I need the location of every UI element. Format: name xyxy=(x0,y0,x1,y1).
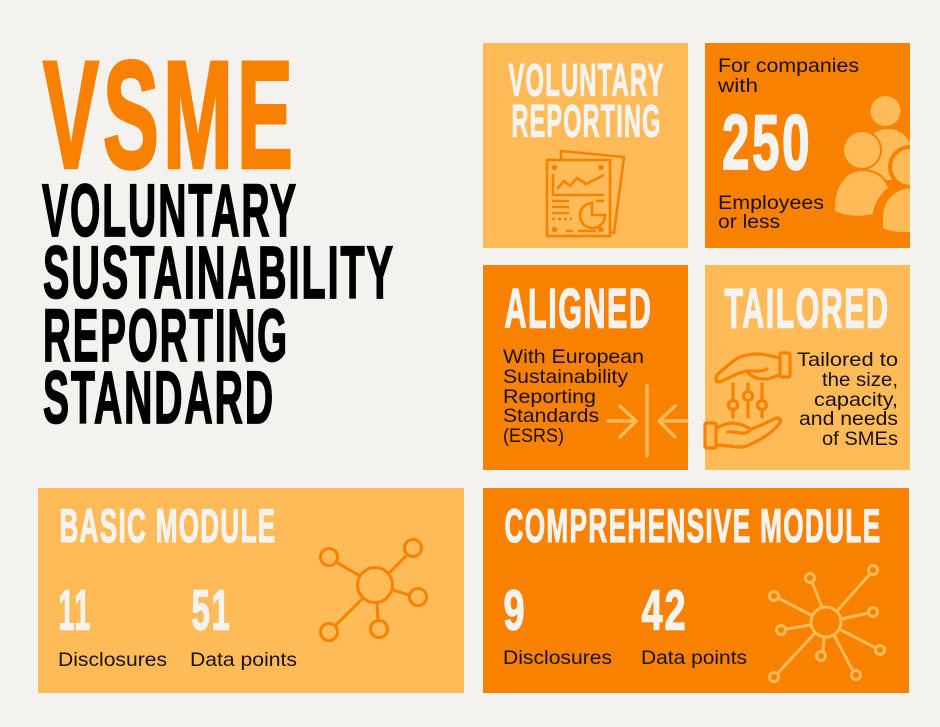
stat: 51 data points: 51 xyxy=(192,578,232,642)
panel: basic module xyxy=(38,488,464,693)
heading: voluntary reporting xyxy=(508,54,664,146)
text: employees or less: Employees xyxy=(718,192,824,214)
subtitle: Voluntary Sustainability Reporting Standard: VOLUNTARY xyxy=(42,169,298,252)
subtitle: Voluntary Sustainability Reporting Standard xyxy=(42,169,395,439)
text: with european sustainability reporting standards: With European xyxy=(503,346,644,368)
subtitle: Voluntary Sustainability Reporting Standard: STANDARD xyxy=(43,356,275,439)
text: tailored to the size capacity needs xyxy=(797,349,898,450)
heading: voluntary reporting: VOLUNTARY xyxy=(508,54,664,106)
icon: arrows converging on a line xyxy=(608,386,687,456)
icon: network hub xyxy=(320,540,426,640)
stat: 9 disclosures: Disclosures xyxy=(503,647,612,669)
stat: 11 disclosures xyxy=(58,578,167,671)
stat: 51 data points: Data points xyxy=(190,649,297,671)
subtitle: Voluntary Sustainability Reporting Standard: REPORTING xyxy=(43,294,289,377)
text: for companies with xyxy=(717,55,859,97)
icon: report document xyxy=(547,151,624,236)
text: with european sustainability reporting standards: (ESRS) xyxy=(503,425,564,447)
text: with european sustainability reporting standards: Sustainability xyxy=(503,366,628,388)
text: with european sustainability reporting standards: Standards xyxy=(503,405,599,427)
icon: hands with sliders xyxy=(705,353,790,448)
text: tailored to the size capacity needs: and needs xyxy=(799,408,898,430)
stat: 11 disclosures: 11 xyxy=(58,578,92,642)
panel: comprehensive module xyxy=(483,488,909,693)
icon: network with many nodes xyxy=(770,566,884,682)
stat: 9 disclosures: 9 xyxy=(504,578,526,642)
panel: tailored xyxy=(705,265,910,470)
text: tailored to the size capacity needs: capacity, xyxy=(814,389,898,411)
panel: company size xyxy=(705,43,932,248)
icon: group of people xyxy=(834,96,910,232)
text: with european sustainability reporting standards xyxy=(503,346,644,447)
heading: basic module: BASIC MODULE xyxy=(60,499,276,552)
text: employees or less xyxy=(718,192,824,233)
number: 250: 250 xyxy=(722,98,812,186)
stat: 51 data points xyxy=(190,578,297,671)
heading: voluntary reporting: REPORTING xyxy=(512,96,662,146)
subtitle: Voluntary Sustainability Reporting Standard: SUSTAINABILITY xyxy=(43,231,395,314)
text: for companies with: For companies xyxy=(718,55,859,77)
stat: 11 disclosures: Disclosures xyxy=(58,649,167,671)
text: tailored to the size capacity needs: Tailored to xyxy=(797,349,898,371)
title: VSME: VSME xyxy=(43,30,297,200)
stat: 42 data points xyxy=(641,578,747,669)
heading: aligned: ALIGNED xyxy=(504,276,652,340)
panel: voluntary reporting xyxy=(483,43,688,248)
text: for companies with: with xyxy=(717,75,758,97)
stat: 42 data points: 42 xyxy=(642,578,688,642)
text: tailored to the size capacity needs: of SMEs xyxy=(822,428,898,450)
text: employees or less: or less xyxy=(718,211,780,233)
stat: 9 disclosures xyxy=(503,578,612,669)
panel: aligned xyxy=(483,265,688,470)
text: with european sustainability reporting standards: Reporting xyxy=(503,386,596,408)
text: tailored to the size capacity needs: the size, xyxy=(822,369,898,391)
stat: 42 data points: Data points xyxy=(641,647,747,669)
